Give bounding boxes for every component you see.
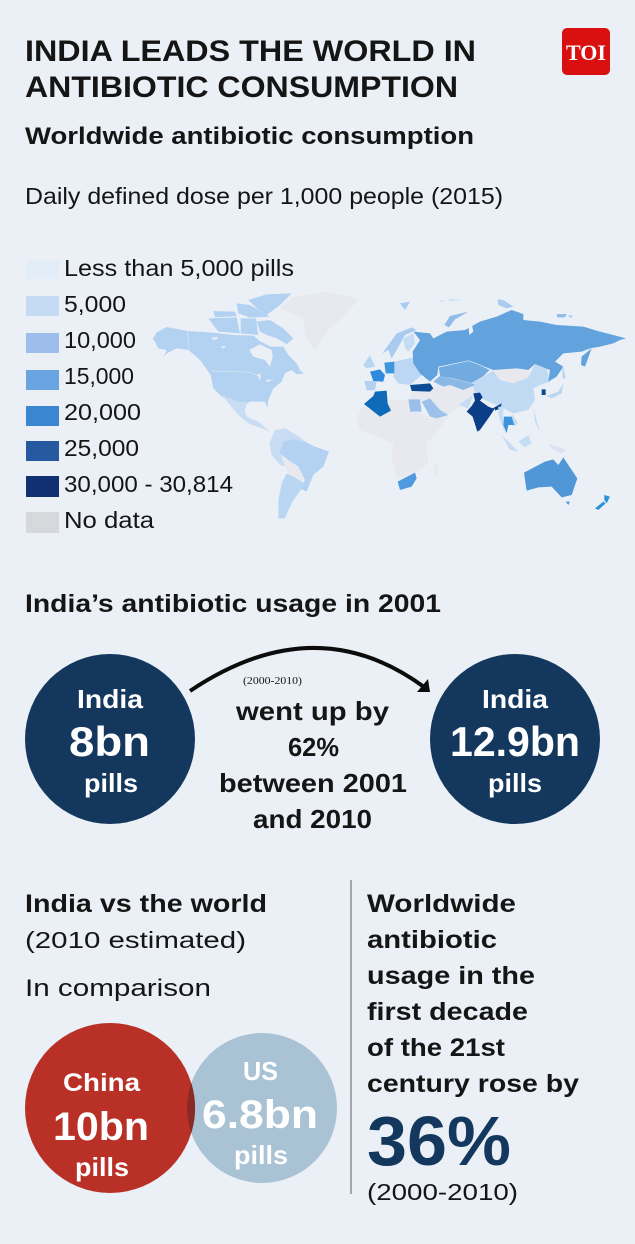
legend: 5,000 <box>64 291 126 317</box>
map: Africa and grey regions <box>357 400 448 490</box>
circle: India 8bn: India <box>77 684 144 714</box>
worldwide usage text: antibiotic <box>367 926 497 954</box>
circle: US 6.8bn: 6.8bn <box>202 1093 318 1137</box>
world map <box>153 292 626 518</box>
circle: US 6.8bn: US <box>243 1056 278 1086</box>
icon: TOI logo <box>562 28 610 75</box>
worldwide usage text: century rose by <box>367 1070 579 1098</box>
growth text: 62% <box>288 732 339 762</box>
map: North America and Greenland <box>153 292 358 408</box>
circle: China 10bn: 10bn <box>53 1105 149 1149</box>
map: Europe and Middle East <box>363 327 478 418</box>
circle: India 12.9bn: 12.9bn <box>450 718 580 765</box>
circle: US 6.8bn: pills <box>234 1140 288 1170</box>
legend: 15,000 <box>64 363 134 389</box>
arrow: growth curve <box>190 648 430 692</box>
map description: Daily defined dose per 1,000 people (2015) <box>25 183 503 209</box>
legend <box>26 255 294 533</box>
title: ANTIBIOTIC CONSUMPTION <box>25 71 458 104</box>
worldwide usage text: Worldwide <box>367 890 516 918</box>
circle: China 10bn <box>25 1023 195 1193</box>
title <box>25 35 476 104</box>
comparison label: In comparison <box>25 975 211 1002</box>
section heading: India vs the world <box>25 890 267 953</box>
map: Southeast Asia and Oceania <box>498 407 610 510</box>
map: Russia and Asia <box>400 299 626 413</box>
circle: China 10bn: pills <box>75 1152 129 1182</box>
worldwide usage text <box>367 890 579 1098</box>
period label: (2000-2010) <box>367 1179 518 1205</box>
icon: TOI logo: TOI <box>566 40 606 65</box>
worldwide usage text: first decade <box>367 998 528 1026</box>
map: Central and South America <box>222 395 270 432</box>
circle: India 8bn: pills <box>84 768 138 798</box>
legend: 25,000 <box>64 435 139 461</box>
section heading: India vs the world: (2010 estimated) <box>25 927 246 953</box>
section heading: India vs the world: India vs the world <box>25 890 267 918</box>
circle: US 6.8bn <box>187 1033 337 1183</box>
circle: India 12.9bn: India <box>482 684 549 714</box>
divider <box>350 880 352 1194</box>
circle: India 12.9bn: pills <box>488 768 542 798</box>
circle: China 10bn: China <box>63 1069 141 1097</box>
period note: (2000-2010) <box>243 676 302 687</box>
title: INDIA LEADS THE WORLD IN <box>25 35 476 68</box>
growth text: between 2001 <box>219 768 407 798</box>
legend: No data <box>64 507 154 533</box>
growth text: and 2010 <box>253 804 372 834</box>
legend: 30,000 - 30,814 <box>64 471 233 497</box>
growth text <box>219 696 407 834</box>
big number: 36%: 36% <box>367 1102 511 1180</box>
circle: India 8bn <box>25 654 195 824</box>
growth text: went up by <box>235 696 390 726</box>
map subtitle: Worldwide antibiotic consumption <box>25 123 474 150</box>
worldwide usage text: of the 21st <box>367 1034 506 1062</box>
circle: India 8bn: 8bn <box>69 718 150 765</box>
legend: Less than 5,000 pills <box>64 255 294 281</box>
map: India <box>458 393 502 432</box>
circle: India 12.9bn <box>430 654 600 824</box>
worldwide usage text: usage in the <box>367 962 535 990</box>
legend: 10,000 <box>64 327 136 353</box>
legend: 20,000 <box>64 399 141 425</box>
section heading: India 2001: India’s antibiotic usage in 2001 <box>25 590 441 618</box>
